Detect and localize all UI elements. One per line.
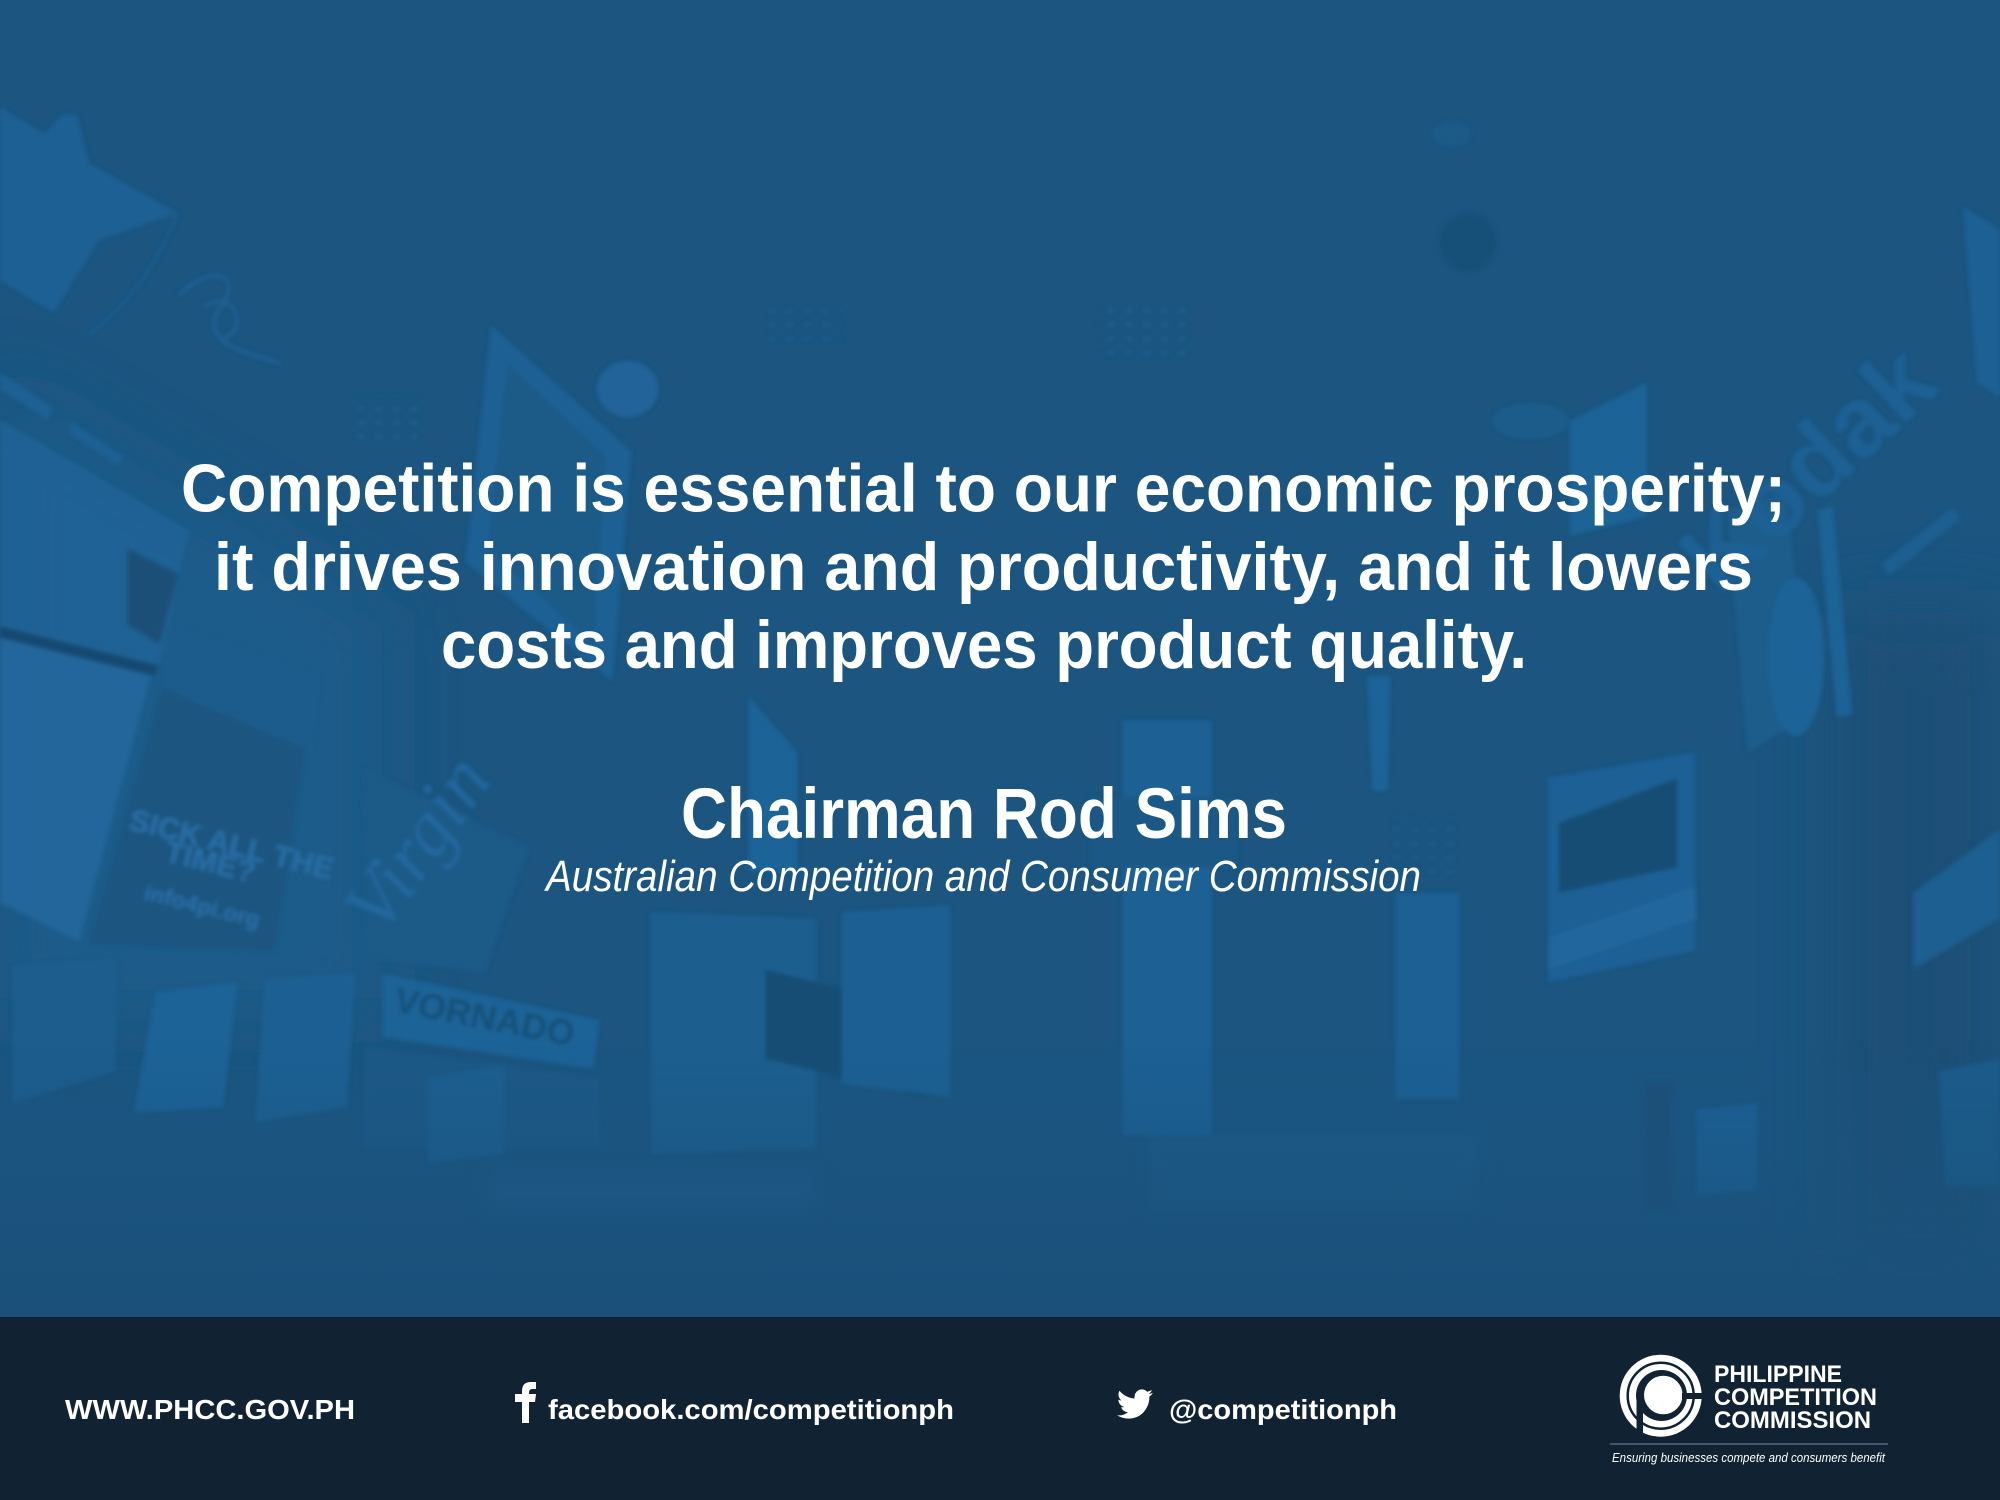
centre tower [1122, 721, 1212, 1135]
left strips [0, 372, 54, 421]
right billboards [1548, 753, 1695, 982]
logo: Philippine Competition Commission [1610, 1355, 1888, 1465]
logo: Philippine Competition Commission: COMPETITION [1714, 1384, 1877, 1411]
virgin panel [364, 768, 529, 973]
quote line 1: Competition is essential to our economic prosperity; [181, 450, 1786, 526]
background: city photo with blue duotone: VORNADO [391, 980, 578, 1054]
central upper billboard [466, 325, 631, 681]
vornado panel [383, 973, 599, 1069]
quote line 2: it drives innovation and productivity, and it lowers [214, 529, 1753, 605]
logo wordmark: PHILIPPINE [1714, 1361, 1842, 1388]
facebook handle: facebook.com/competitionph [548, 1394, 954, 1425]
lower posters [13, 959, 117, 1103]
photo signage: SICK ALL THE [126, 803, 337, 886]
sick sign panel [89, 676, 306, 950]
centre buildings [651, 912, 816, 1154]
logo mark [1620, 1355, 1706, 1437]
footer bar [0, 1317, 2000, 1500]
street lights [485, 1135, 1480, 1212]
kodak wall [1727, 491, 1811, 753]
icon: twitter [1117, 1389, 1153, 1419]
window lights [351, 395, 427, 441]
left billboards [0, 420, 189, 666]
logo: Philippine Competition Commission: COMMISSION [1714, 1407, 1871, 1434]
twitter handle: @competitionph [1169, 1394, 1397, 1425]
left statue [0, 107, 177, 313]
right column [1395, 893, 1459, 1100]
clock and spire [1440, 214, 1496, 270]
background: city photo with blue duotone: Virgin [326, 740, 508, 948]
background: city photo with blue duotone: info4pi.org [142, 879, 263, 933]
kodak sign: Kodak [1659, 324, 1957, 613]
logo tagline: Ensuring businesses compete and consumers benefit [1612, 1450, 1886, 1465]
upper light column [1570, 383, 1647, 536]
quote line 3: costs and improves product quality. [441, 607, 1527, 683]
attribution name: Chairman Rod Sims [681, 775, 1287, 854]
signature scrawl [179, 276, 281, 364]
website: WWW.PHCC.GOV.PH [65, 1394, 355, 1425]
background: city photo with blue duotone: TIME? [162, 835, 259, 890]
icon: facebook [515, 1382, 536, 1423]
attribution organisation: Australian Competition and Consumer Commission [543, 852, 1421, 901]
quote text [181, 450, 1786, 901]
